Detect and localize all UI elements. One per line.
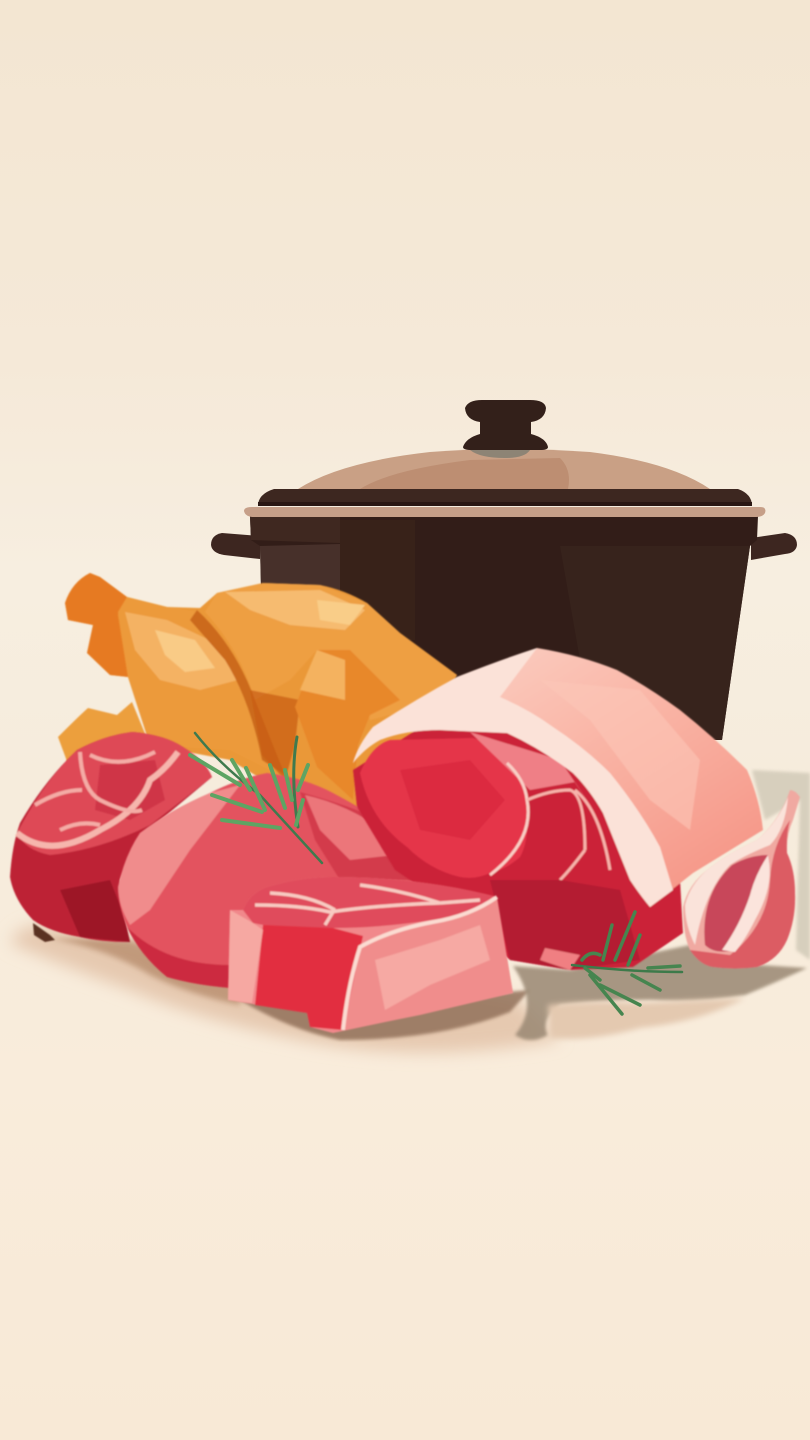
- ground shadow: [10, 770, 810, 1052]
- pot lid: [258, 400, 752, 506]
- cooking pot: [211, 400, 797, 740]
- chicken: [58, 573, 457, 810]
- front steak: [228, 877, 513, 1033]
- pot body: [250, 516, 758, 740]
- left dark beef cut: [10, 732, 212, 942]
- rosemary sprig, lower: [572, 912, 682, 1014]
- large roast with fat cap: [353, 648, 763, 970]
- pot handles: [211, 533, 797, 560]
- pot rim: [244, 507, 765, 517]
- rosemary sprig, upper: [190, 733, 322, 863]
- garlic clove: [683, 790, 800, 968]
- round pink beef cut: [118, 773, 420, 988]
